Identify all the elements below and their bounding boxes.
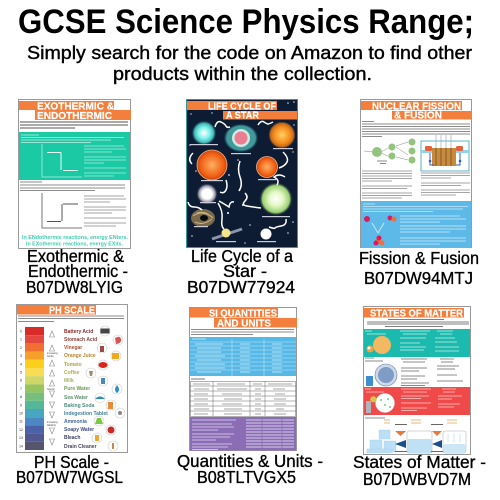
pH numbers: 0 (20, 330, 22, 334)
subtitle (27, 42, 472, 84)
panel: nuclear fission and fusion poster (360, 100, 472, 248)
pH numbers: 11 (19, 420, 23, 424)
subtitle: products within the collection. (113, 63, 372, 84)
acidity and alkalinity arrows (50, 331, 54, 445)
heading: states of matter: STATES OF MATTER (370, 308, 463, 320)
heading: exothermic and endothermic (19, 101, 131, 122)
substance labels: Sea Water (64, 395, 88, 401)
boiling arrows (431, 424, 443, 452)
heading: pH scale: PH SCALE (49, 306, 95, 316)
label: pH scale (16, 452, 123, 487)
star: red super giant (197, 150, 227, 181)
pH numbers: 12 (19, 428, 23, 432)
star: supernova (196, 183, 218, 205)
takeaway text (22, 235, 128, 248)
substance labels: Milk (64, 378, 74, 384)
substance labels: Stomach Acid (64, 337, 97, 343)
star: average star (268, 121, 296, 149)
pH numbers: 14 (19, 444, 23, 448)
label: pH scale: B07DW7WGSL (16, 467, 123, 487)
background stars (189, 101, 295, 244)
substance labels: Vinegar (64, 345, 82, 351)
takeaway text: In EXothermic reactions, energy EXits. (26, 242, 123, 248)
acidity labels: Increasing (47, 421, 58, 424)
star: red giant (256, 156, 278, 180)
substance labels: Pure Water (64, 386, 90, 392)
label: exothermic and endothermic: Endothermic - (28, 261, 128, 281)
acidity labels (47, 352, 58, 427)
diagram: nuclear reactor (421, 135, 469, 171)
beaker of liquid (407, 431, 432, 453)
pH numbers: 9 (20, 403, 22, 407)
subtitle: Simply search for the code on Amazon to find other (27, 42, 472, 63)
label: exothermic and endothermic (26, 246, 128, 297)
substance labels: Soapy Water (64, 427, 94, 433)
label: quantities and units: Quantities & Units - (177, 451, 323, 471)
panel: pH scale poster (16, 304, 128, 452)
pH numbers: 2 (20, 346, 22, 350)
pH numbers: 13 (19, 436, 23, 440)
star: black hole (191, 209, 215, 227)
substance icons (86, 326, 125, 451)
section: solid (364, 329, 470, 357)
substance labels: Bleach (64, 435, 80, 441)
substance labels: Drain Cleaner (64, 444, 97, 450)
label: quantities and units: B08TLTVGX5 (197, 467, 296, 487)
table: derived units (190, 379, 296, 416)
pH numbers: 7 (20, 387, 22, 391)
takeaway text: In ENdothermic reactions, energy ENters. (22, 235, 128, 241)
table: base units (190, 337, 296, 376)
fusion section (361, 201, 471, 248)
acidity labels: Acidity (47, 355, 55, 358)
section: state changes (365, 418, 466, 453)
acidity labels: Neutral (47, 388, 55, 391)
substance labels: Coffee (64, 370, 80, 376)
substance labels: Indegestion Tablet (64, 411, 108, 417)
pH colour bar (25, 327, 44, 450)
label: states of matter: States of Matter - (353, 452, 486, 472)
heading: SI quantities and units (190, 308, 297, 330)
label: fission and fusion: B07DW94MTJ (364, 268, 473, 288)
section: liquid (365, 358, 463, 386)
heading: exothermic and endothermic: ENDOTHERMIC (37, 111, 112, 122)
heading: life cycle of a star: LIFE CYCLE OF (208, 102, 276, 112)
ice cubes (367, 430, 396, 453)
star: massive star (190, 120, 218, 146)
substance labels (64, 329, 108, 450)
heading: SI quantities and units: AND UNITS (217, 318, 271, 330)
section: gas (364, 387, 470, 415)
pH numbers: 1 (20, 338, 22, 342)
heading: pH scale (17, 305, 96, 316)
substance labels: Ammonia (64, 419, 87, 425)
acidity labels: Alkalinity (47, 424, 57, 427)
substance labels: Orange Juice (64, 353, 96, 359)
pH numbers: 10 (19, 412, 23, 416)
beaker of gas (443, 431, 466, 453)
heading: life cycle of a star (187, 101, 297, 122)
panel: life cycle of a star poster (186, 100, 298, 248)
exothermic section (19, 132, 130, 180)
heading: SI quantities and units: SI QUANTITIES (209, 308, 277, 320)
acidity labels: Increasing (47, 352, 58, 355)
panel: states of matter poster (364, 306, 470, 454)
star: planetary nebula (259, 182, 293, 217)
diagram: fission chain reaction (364, 138, 416, 164)
arrows between stages (188, 121, 288, 229)
label: fission and fusion (359, 248, 479, 288)
label: life cycle of a star: Star - (223, 261, 267, 281)
substance labels: Tomato (64, 362, 82, 368)
label: exothermic and endothermic: Exothermic & (27, 246, 124, 266)
heading: nuclear fission and fusion: & FUSION (394, 110, 442, 122)
label: life cycle of a star: B07DW77924 (187, 277, 295, 297)
pH numbers: 4 (20, 362, 22, 366)
substance labels: Baking Soda (64, 403, 95, 409)
label: pH scale: PH Scale - (34, 452, 109, 472)
endothermic section (20, 182, 126, 228)
label: states of matter (353, 452, 486, 489)
substance labels: Battery Acid (64, 329, 93, 335)
heading: life cycle of a star: A STAR (226, 110, 259, 122)
panel: exothermic and endothermic poster (18, 100, 131, 248)
heading: nuclear fission and fusion: NUCLEAR FISSION (372, 102, 461, 112)
melting arrows (395, 424, 407, 452)
heading: exothermic and endothermic: EXOTHERMIC & (37, 102, 114, 112)
pH numbers: 8 (20, 395, 22, 399)
heading: nuclear fission and fusion (361, 101, 472, 122)
pH numbers: 3 (20, 354, 22, 358)
pH numbers (19, 330, 23, 448)
label: fission and fusion: Fission & Fusion (359, 248, 479, 268)
panel: SI quantities and units poster (190, 308, 297, 450)
label: life cycle of a star: Life Cycle of a (191, 246, 293, 266)
label: states of matter: B07DWBVD7M (363, 469, 471, 489)
table: prefixes (190, 417, 296, 450)
pH numbers: 5 (20, 370, 22, 374)
star: neutron star (212, 228, 242, 242)
pH numbers: 6 (20, 379, 22, 383)
star: white dwarf (257, 228, 276, 242)
label: exothermic and endothermic: B07DW8LYIG (26, 277, 123, 297)
label: quantities and units (177, 451, 323, 487)
label: life cycle of a star (187, 246, 295, 297)
star: stellar nebula (223, 123, 259, 154)
